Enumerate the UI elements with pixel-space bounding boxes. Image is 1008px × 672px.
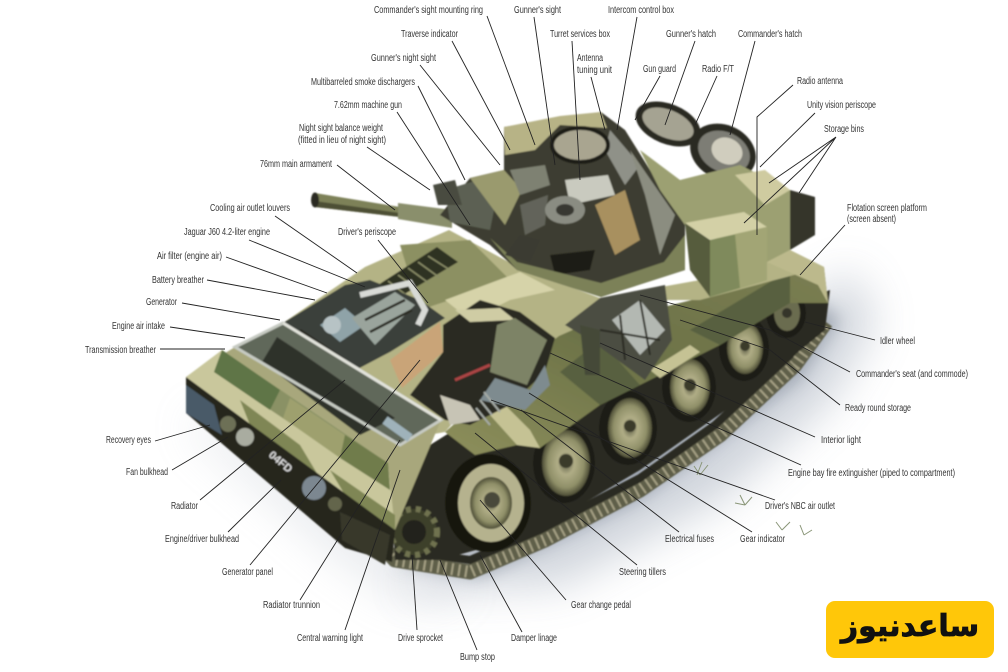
label: Driver's periscope: Driver's periscope: [338, 227, 396, 238]
turret ring lip: [490, 235, 685, 297]
label: Air filter: Air filter (engine air): [157, 251, 222, 262]
label: Damper linage: Damper linage: [511, 633, 557, 644]
label: Radio F/T: Radio F/T: [702, 64, 734, 75]
label: Drive sprocket: [398, 555, 443, 644]
grass tufts: [694, 462, 812, 535]
label: Intercom control box: [608, 5, 674, 130]
label: Recovery eyes: Recovery eyes: [106, 435, 151, 446]
label: Engine/driver bulkhead: Engine/driver bulkhead: [165, 534, 239, 545]
label: Night sight balance weight: (fitted in lieu of night sight): [298, 135, 386, 146]
label: 76mm main armament: 76mm main armament: [260, 159, 332, 170]
idler wheel: [766, 288, 806, 338]
label: Interior light: [600, 343, 861, 446]
driver seat: [490, 318, 547, 385]
label: Generator: [146, 297, 280, 320]
hull top deck: [235, 230, 824, 440]
label: Flotation screen platform: [800, 203, 927, 275]
commander's hatch: [681, 113, 765, 191]
storage bin: front: [685, 212, 767, 297]
label: Driver's periscope: [338, 227, 428, 303]
label: Commander's hatch: [730, 29, 802, 135]
label: Damper linage: [480, 555, 557, 644]
label: Bump stop: [440, 560, 495, 663]
label: Generator panel: [222, 360, 420, 578]
label: Driver's NBC air outlet: [491, 400, 835, 512]
tan bulkhead: [390, 322, 443, 388]
wheel 1: [445, 454, 531, 552]
label: Gun guard: Gun guard: [643, 64, 676, 75]
wheel 4: [662, 352, 716, 422]
label: Unity vision periscope: [760, 100, 876, 167]
label: Storage bins: Storage bins: [824, 124, 864, 135]
label: Engine air intake: [112, 321, 245, 338]
gunner's hatch: [629, 93, 707, 155]
label: Ready round storage: [680, 320, 911, 414]
label: Air filter: [157, 251, 327, 293]
label: Traverse indicator: [401, 29, 510, 150]
label: Radiator: [171, 380, 345, 512]
drive sprocket: [391, 509, 437, 555]
wheel 5: [719, 315, 769, 381]
label: Flotation screen platform: (screen absent): [847, 214, 896, 225]
label: 7.62mm machine gun: [334, 100, 470, 225]
label: Night sight balance weight: [298, 123, 430, 190]
label: Fan bulkhead: Fan bulkhead: [126, 467, 168, 478]
label: Drive sprocket: Drive sprocket: [398, 633, 443, 644]
track: [372, 322, 826, 572]
label: Gear change pedal: Gear change pedal: [571, 600, 631, 611]
engine bay cutaway: [283, 280, 445, 372]
wheel 2: [533, 423, 595, 503]
label: Transmission breather: Transmission breather: [85, 345, 156, 356]
label: Steering tillers: [475, 433, 666, 578]
wheel 3: [599, 391, 657, 465]
label: Radiator trunnion: [263, 440, 400, 611]
tank illustration: [186, 93, 830, 572]
storage bin: right: [790, 190, 815, 250]
label: Cooling air outlet louvers: Cooling air outlet louvers: [210, 203, 290, 214]
mudflap: [340, 512, 390, 565]
label: Electrical fuses: Electrical fuses: [665, 534, 714, 545]
label: Idler wheel: [805, 322, 915, 347]
label: Multibarreled smoke dischargers: Multibarreled smoke dischargers: [311, 77, 415, 88]
label: Gunner's night sight: [371, 53, 500, 165]
hull side plate: [445, 267, 828, 455]
label: Flotation screen platform: Flotation screen platform: [847, 203, 927, 214]
watermark badge: [826, 601, 994, 658]
right side compartment cutaway: [565, 285, 672, 380]
label: Turret services box: [550, 29, 610, 180]
turret interior detail: [510, 165, 550, 195]
label: Fan bulkhead: [126, 437, 228, 478]
label: Gunner's sight: [514, 5, 561, 165]
label: Jaguar J60 engine: [184, 227, 365, 287]
label: Engine/driver bulkhead: [165, 480, 281, 545]
label: Turret services box: Turret services box: [550, 29, 610, 40]
label: Central warning light: Central warning light: [297, 633, 363, 644]
label: Commander's sight mounting ring: [374, 5, 535, 145]
label: Night sight balance weight: Night sight balance weight: [299, 123, 383, 134]
label: Engine bay fire extinguisher: [550, 353, 955, 479]
label: 76mm main armament: [260, 159, 395, 210]
label: Intercom control box: Intercom control box: [608, 5, 674, 16]
label: Radio antenna: [757, 76, 843, 235]
label: Generator panel: Generator panel: [222, 567, 273, 578]
road wheels: [391, 288, 806, 555]
watermark badge: ساعدنیوز: [839, 609, 979, 644]
label: Cooling air outlet louvers: [210, 203, 357, 273]
label: 7.62mm machine gun: 7.62mm machine gun: [334, 100, 402, 111]
label: Battery breather: Battery breather: [152, 275, 204, 286]
label: Gear indicator: Gear indicator: [740, 534, 785, 545]
label: Gear indicator: [529, 393, 785, 545]
label: Recovery eyes: [106, 425, 210, 446]
label: Radio antenna: Radio antenna: [797, 76, 843, 87]
ground shadow: [190, 270, 875, 600]
radiator frame: [235, 323, 441, 445]
gun barrel: [311, 192, 452, 228]
label: Interior light: Interior light: [821, 435, 861, 446]
label: Antenna tuning unit: Antenna: [577, 53, 603, 64]
label: Jaguar J60 engine: Jaguar J60 4.2-liter engine: [184, 227, 270, 238]
label: Gunner's night sight: Gunner's night sight: [371, 53, 436, 64]
label: Gunner's sight: Gunner's sight: [514, 5, 561, 16]
label: Commander's hatch: Commander's hatch: [738, 29, 802, 40]
label: Battery breather: [152, 275, 315, 300]
label: Driver's NBC air outlet: Driver's NBC air outlet: [765, 501, 835, 512]
label: Ready round storage: Ready round storage: [845, 403, 911, 414]
turret: [433, 112, 685, 297]
registration plate: 04FD: [266, 449, 294, 476]
label: Electrical fuses: [521, 410, 714, 545]
label: Generator: Generator: [146, 297, 177, 308]
label: Steering tillers: Steering tillers: [619, 567, 666, 578]
label: Idler wheel: Idler wheel: [880, 336, 915, 347]
label: Radiator: Radiator: [171, 501, 198, 512]
label: Gun guard: [635, 64, 676, 120]
label: Gear change pedal: [480, 500, 631, 611]
label: Traverse indicator: Traverse indicator: [401, 29, 458, 40]
label: Radio F/T: [695, 64, 734, 125]
recovery eyes and lamps: [220, 416, 236, 432]
driver compartment cutaway: [410, 300, 555, 425]
rear turret shell: [640, 150, 790, 262]
label: Gunner's hatch: [665, 29, 716, 125]
label: Antenna tuning unit: tuning unit: [577, 65, 612, 76]
label: Bump stop: Bump stop: [460, 652, 495, 663]
label: Multibarreled smoke dischargers: [311, 77, 465, 180]
label: Central warning light: [297, 470, 400, 644]
label: Engine air intake: Engine air intake: [112, 321, 165, 332]
dark underside of hull behind wheels: [390, 290, 830, 560]
label: Storage bins: [744, 124, 864, 223]
engine air louvers: [378, 247, 458, 298]
label: Commander's sight mounting ring: Commander's sight mounting ring: [374, 5, 483, 16]
label: Commander's seat: [640, 295, 968, 380]
label: Unity vision periscope: Unity vision periscope: [807, 100, 876, 111]
nose underside: [186, 377, 395, 562]
label: Antenna tuning unit: [577, 53, 612, 130]
label: Gunner's hatch: Gunner's hatch: [666, 29, 716, 40]
label: Commander's seat: Commander's seat (and commode): [856, 369, 968, 380]
front glacis plate: [186, 350, 395, 565]
flotation screen platform: [767, 250, 828, 303]
nose base fill: [186, 347, 441, 530]
label: Radiator trunnion: Radiator trunnion: [263, 600, 320, 611]
